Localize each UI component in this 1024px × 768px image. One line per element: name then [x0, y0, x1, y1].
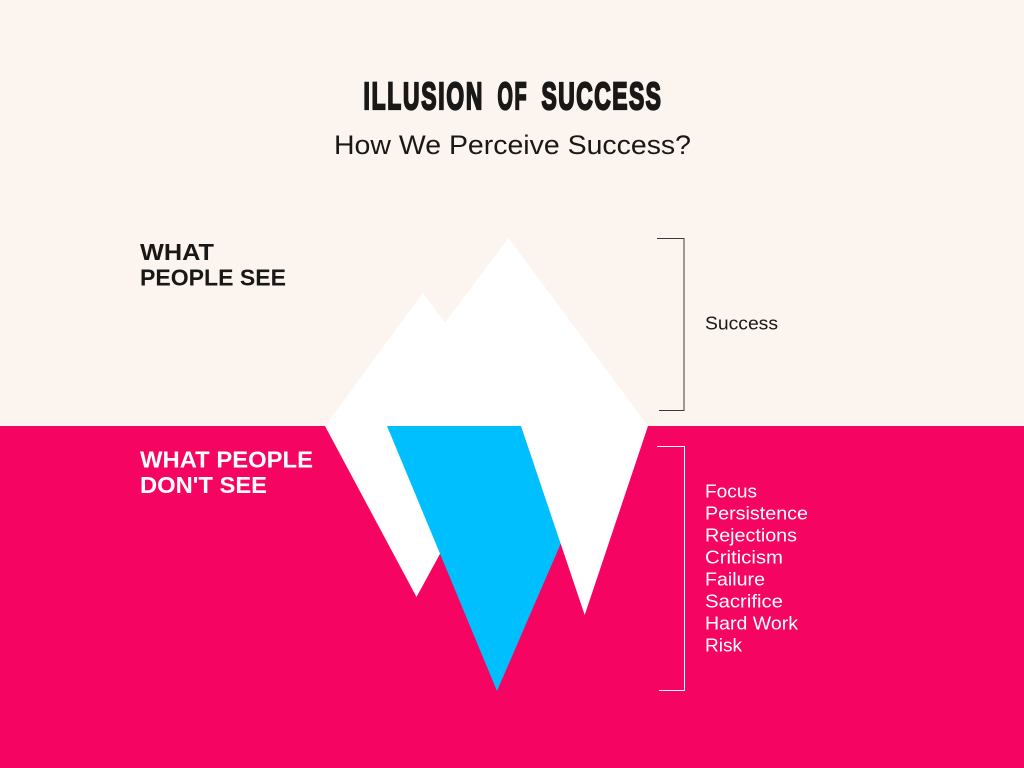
title: OF	[498, 76, 527, 118]
list: hidden factors: Rejections	[705, 524, 797, 546]
subtitle: How We Perceive Success?	[334, 130, 691, 160]
list: hidden factors: Sacrifice	[705, 590, 783, 612]
iceberg tip above water	[325, 238, 648, 426]
iceberg centre blue shard	[387, 426, 561, 691]
label: success: Success	[705, 314, 778, 334]
iceberg	[325, 238, 648, 691]
panel: below water background	[0, 426, 1024, 768]
heading: what people see	[140, 239, 286, 290]
list: hidden factors: Focus	[705, 480, 757, 502]
bracket: visible part	[657, 238, 684, 410]
title: ILLUSION	[364, 75, 482, 117]
list: hidden factors: Risk	[705, 634, 743, 656]
panel: above water background	[0, 0, 1024, 426]
heading: what people see: WHAT	[140, 239, 215, 265]
title	[364, 75, 661, 118]
list: hidden factors: Criticism	[705, 546, 783, 568]
iceberg right underwater shard	[521, 426, 648, 615]
heading: what people see: PEOPLE SEE	[140, 264, 286, 290]
heading: what people don't see	[140, 446, 313, 498]
list: hidden factors: Hard Work	[705, 612, 799, 634]
list: hidden factors: Failure	[705, 568, 765, 590]
heading: what people don't see: WHAT PEOPLE	[140, 446, 313, 472]
title: SUCCESS	[542, 75, 661, 117]
heading: what people don't see: DON'T SEE	[140, 472, 267, 498]
list: hidden factors: Persistence	[705, 502, 808, 524]
list: hidden factors	[705, 480, 808, 656]
iceberg left underwater shard	[325, 426, 441, 597]
bracket: hidden part	[657, 446, 684, 690]
